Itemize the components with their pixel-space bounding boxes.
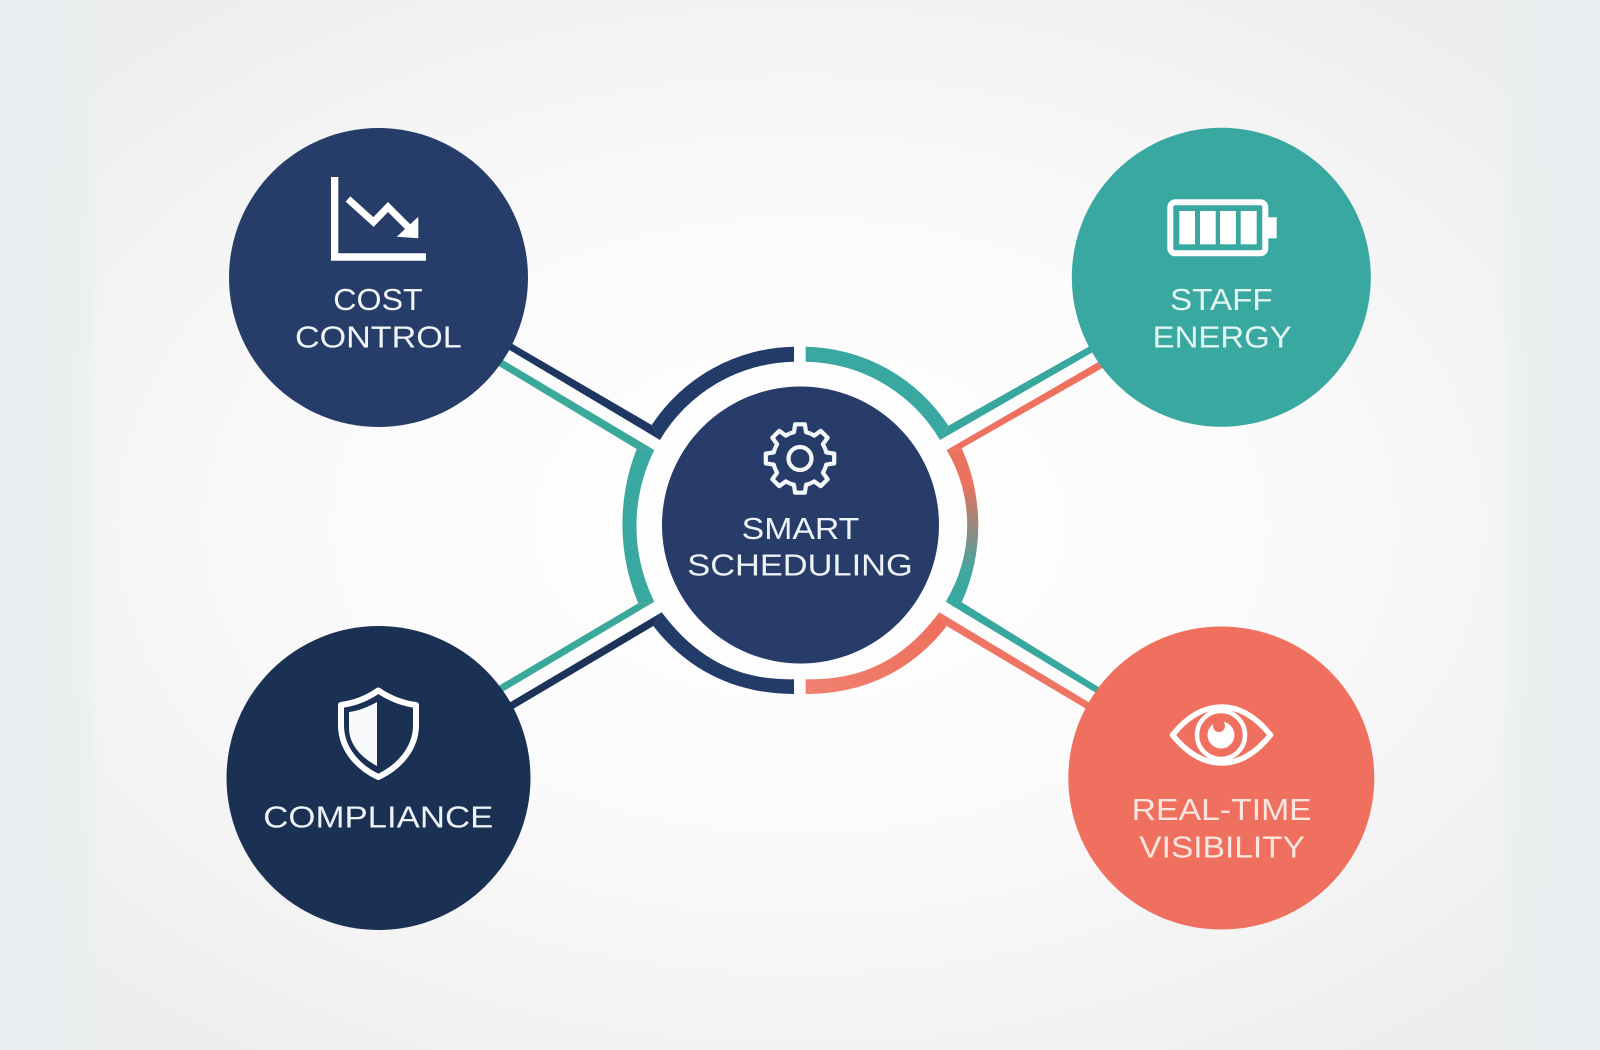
label: staff energy: STAFF: [1170, 282, 1273, 317]
label: smart scheduling: [687, 511, 913, 582]
icon: shield: [341, 690, 416, 777]
label: cost control: CONTROL: [295, 320, 462, 354]
label: staff energy: ENERGY: [1153, 320, 1292, 354]
connector: staff energy to hub, coral: [947, 355, 1110, 450]
connector: real-time visibility to hub, coral: [939, 612, 1100, 717]
label: smart scheduling: SMART: [742, 511, 859, 546]
label: real-time visibility: REAL-TIME: [1132, 792, 1312, 827]
hub ring: left teal arc: [622, 449, 654, 603]
connector: staff energy to hub, teal: [940, 340, 1100, 440]
icon: falling cost chart: [331, 177, 426, 261]
label: staff energy: [1153, 282, 1292, 354]
label: real-time visibility: VISIBILITY: [1139, 830, 1305, 864]
panel: cost control: [229, 128, 528, 427]
panel: smart scheduling hub: [662, 386, 939, 664]
icon: battery: [1170, 202, 1277, 253]
connector: cost control to hub, navy: [500, 337, 660, 440]
connector: cost control to hub, teal: [495, 355, 654, 450]
hub ring: top-left navy arc: [652, 347, 794, 440]
label: smart scheduling: SCHEDULING: [687, 548, 913, 582]
connector: real-time visibility to hub, teal: [946, 602, 1105, 698]
icon: gear: [766, 424, 834, 493]
hub ring: top-right teal arc: [806, 347, 948, 440]
label: real-time visibility: [1132, 792, 1312, 864]
icon: eye: [1172, 707, 1270, 763]
connector: compliance to hub, navy: [500, 612, 662, 717]
label: compliance: COMPLIANCE: [263, 800, 493, 834]
label: cost control: [295, 282, 462, 354]
label: cost control: COST: [333, 282, 423, 317]
connector: compliance to hub, teal: [495, 602, 654, 696]
panel: compliance: [226, 626, 530, 930]
hub ring: bottom-left navy arc: [653, 612, 794, 694]
panel: real-time visibility: [1068, 626, 1374, 930]
hub ring: bottom-right coral arc: [806, 612, 947, 694]
hub ring: right gradient arc: [946, 448, 978, 602]
panel: staff energy: [1072, 128, 1371, 427]
